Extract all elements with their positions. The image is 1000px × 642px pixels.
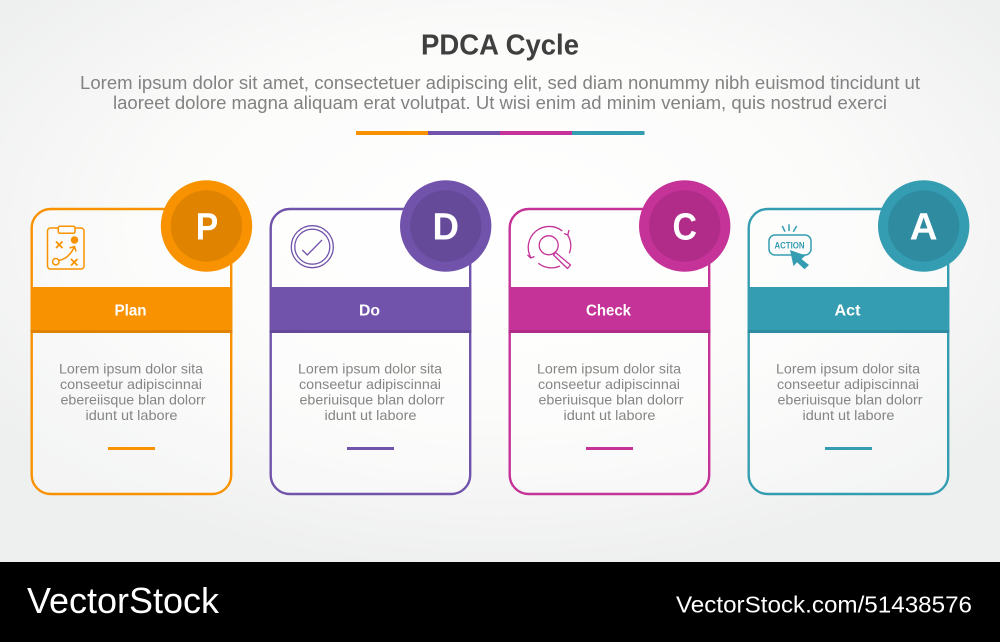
heading band: Act: Act xyxy=(834,302,861,320)
body text: eberiuisque blan dolorr xyxy=(538,392,684,408)
footer bar: VectorStock.com/51438576 xyxy=(676,592,972,618)
panel: check xyxy=(508,180,730,494)
body text: conseetur adipiscinnai xyxy=(538,376,680,392)
body text xyxy=(776,360,923,423)
letter badge: A: A xyxy=(910,206,938,248)
accent dash xyxy=(108,447,155,450)
body text: idunt ut labore xyxy=(86,407,178,423)
subtitle text: Lorem ipsum dolor sit amet, consectetuer adipiscing elit, sed diam nonummy nibh euismod tincidunt ut xyxy=(80,72,920,93)
body text: Lorem ipsum dolor sita xyxy=(537,360,681,376)
body text: Lorem ipsum dolor sita xyxy=(776,360,920,376)
heading band: Check xyxy=(508,287,710,333)
letter badge: C: C xyxy=(672,206,697,248)
footer bar: VectorStock xyxy=(27,580,220,621)
heading band: Plan: Plan xyxy=(114,302,146,320)
heading band: Check: Check xyxy=(586,302,631,320)
panel: plan xyxy=(30,180,252,494)
heading band: Do: Do xyxy=(359,302,380,320)
body text: idunt ut labore xyxy=(564,407,656,423)
letter badge: P xyxy=(161,180,252,272)
panel: do xyxy=(270,180,491,494)
card outline xyxy=(271,209,470,494)
icon: clipboard strategy xyxy=(48,226,84,269)
card outline xyxy=(510,209,709,494)
subtitle text: laoreet dolore magna aliquam erat volutpat. Ut wisi enim ad minim veniam, quis nostrud exerci xyxy=(113,92,887,113)
heading band: Act xyxy=(748,287,949,333)
body text: conseetur adipiscinnai xyxy=(299,376,441,392)
body text xyxy=(59,360,206,423)
panel: act xyxy=(748,180,969,494)
letter badge: D: D xyxy=(432,206,459,248)
letter badge: D xyxy=(400,180,491,272)
accent dash xyxy=(347,447,394,450)
body text: eberiuisque blan dolorr xyxy=(300,392,445,408)
body text: Lorem ipsum dolor sita xyxy=(59,360,203,376)
heading band: Plan xyxy=(30,287,232,333)
heading band: Do xyxy=(270,287,471,333)
body text: conseetur adipiscinnai xyxy=(777,376,919,392)
icon: action button with cursor xyxy=(769,224,811,269)
card outline xyxy=(32,209,231,494)
icon: magnifier with cycle arrows xyxy=(528,226,571,268)
body text xyxy=(298,360,445,423)
footer bar xyxy=(0,562,1000,642)
body text: ebereiisque blan dolorr xyxy=(60,392,206,408)
body text: eberiuisque blan dolorr xyxy=(778,392,923,408)
title: PDCA Cycle xyxy=(421,30,579,62)
subtitle text xyxy=(80,72,920,113)
icon: check mark seal xyxy=(291,226,333,268)
letter badge: P: P xyxy=(196,206,218,248)
body text xyxy=(537,360,684,423)
body text: idunt ut labore xyxy=(802,407,895,423)
icon: action button with cursor: ACTION xyxy=(774,240,805,251)
body text: Lorem ipsum dolor sita xyxy=(298,360,442,376)
body text: idunt ut labore xyxy=(324,407,417,423)
accent dash xyxy=(586,447,633,450)
letter badge: A xyxy=(878,180,969,272)
accent dash xyxy=(825,447,872,450)
body text: conseetur adipiscinnai xyxy=(60,376,202,392)
colour divider xyxy=(356,131,644,135)
letter badge: C xyxy=(639,180,730,272)
card outline xyxy=(749,209,948,494)
